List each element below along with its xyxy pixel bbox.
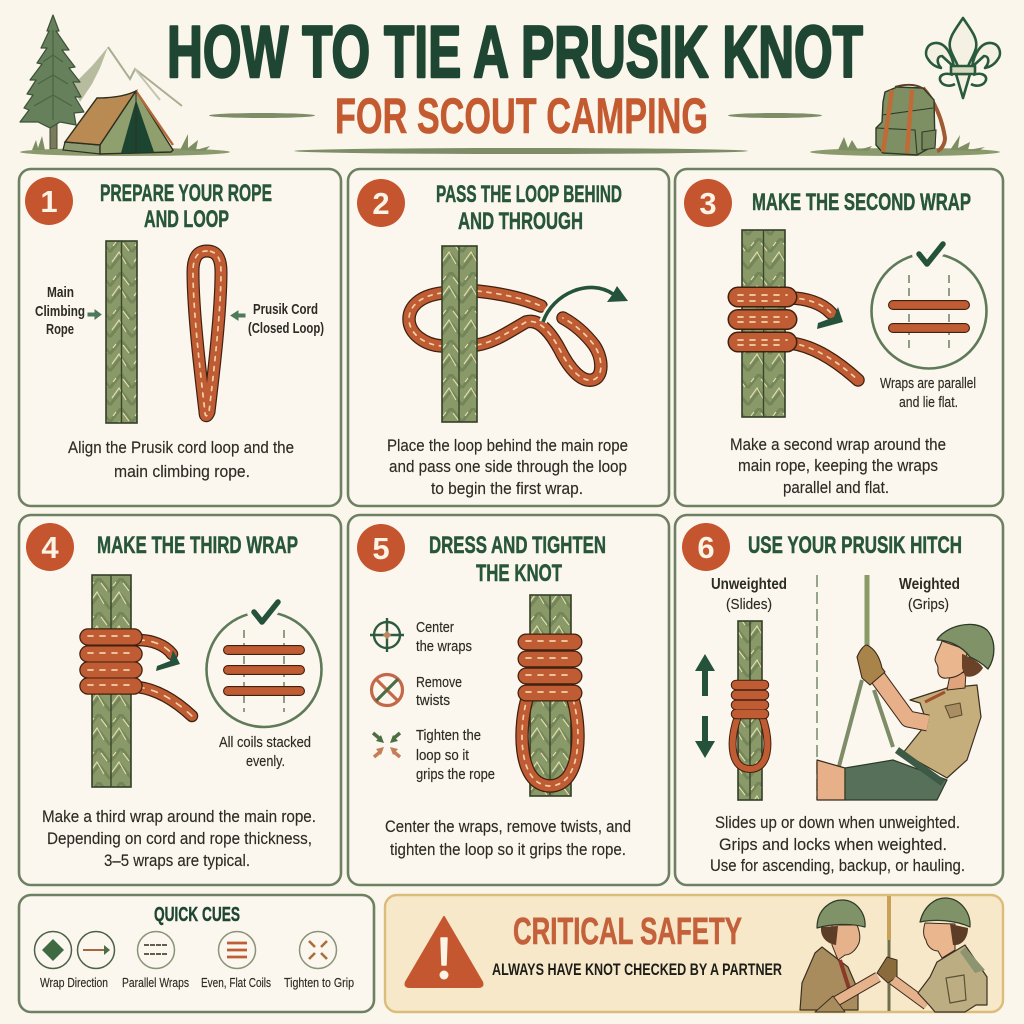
main rope — [738, 621, 762, 800]
step number 1: 1 — [40, 184, 58, 219]
step 4 text: Make a third wrap around the main rope. — [42, 807, 316, 826]
arrow: wrap direction — [817, 307, 843, 329]
icon: tighten arrows — [373, 733, 400, 757]
label: unweighted: Unweighted — [711, 576, 787, 593]
step 5 heading — [429, 532, 606, 587]
step number 4 — [26, 523, 74, 571]
cue icon: tighten — [300, 932, 336, 968]
step 6 text: Use for ascending, backup, or hauling. — [710, 856, 965, 875]
small prusik knot — [733, 685, 767, 769]
callout circle: stacked coils — [206, 612, 322, 727]
label: prusik cord: Prusik Cord — [253, 302, 318, 318]
step 2 heading: AND THROUGH — [458, 208, 583, 235]
illustration: two scouts checking knot — [800, 896, 987, 1012]
wraps — [738, 295, 787, 345]
step number 2 — [357, 179, 405, 227]
step number 3: 3 — [699, 186, 717, 221]
step 6 text: Grips and locks when weighted. — [719, 835, 947, 854]
step 5 heading: THE KNOT — [476, 560, 562, 587]
cue labels: Parallel Wraps — [122, 975, 189, 990]
tips text: the wraps — [416, 639, 472, 655]
icon: check mark — [254, 602, 278, 622]
step 1 text — [68, 438, 294, 481]
step number 2: 2 — [372, 186, 390, 221]
step 3 text: Make a second wrap around the — [730, 435, 946, 454]
cue icon: even coils — [218, 932, 256, 968]
cue labels — [40, 975, 354, 990]
step number 4: 4 — [41, 530, 59, 565]
prusik cord loop — [409, 291, 601, 380]
label: unweighted: (Slides) — [726, 597, 772, 613]
panel: step 1 — [19, 169, 341, 506]
safety heading: CRITICAL SAFETY — [513, 911, 742, 953]
callout caption: All coils stacked — [219, 735, 311, 751]
safety message: ALWAYS HAVE KNOT CHECKED BY A PARTNER — [492, 960, 782, 979]
left scout — [800, 947, 858, 1010]
step number 6 — [682, 523, 730, 571]
label: prusik cord: (Closed Loop) — [248, 321, 324, 337]
callout caption — [880, 376, 976, 411]
main rope — [92, 575, 131, 787]
label: main climbing rope: Rope — [46, 321, 74, 338]
arrow to main rope — [88, 310, 101, 319]
cue labels: Even, Flat Coils — [201, 975, 271, 990]
step number 5 — [357, 524, 405, 572]
header illustration: tent — [20, 91, 230, 156]
tips text: Tighten the — [416, 728, 481, 744]
arrow down — [695, 716, 715, 758]
panel: step 2 — [348, 169, 669, 506]
cue labels: Tighten to Grip — [284, 975, 354, 990]
header illustration: mountain — [72, 47, 182, 106]
main rope — [106, 241, 137, 423]
step 3 text — [730, 435, 946, 497]
subtitle: FOR SCOUT CAMPING — [335, 88, 708, 144]
step 1 heading: PREPARE YOUR ROPE — [100, 180, 272, 207]
quick cues heading: QUICK CUES — [154, 904, 240, 926]
step 2 text: Place the loop behind the main rope — [387, 436, 628, 455]
arrow to prusik cord — [231, 311, 245, 320]
tightened knot — [522, 641, 578, 786]
callout caption: Wraps are parallel — [880, 376, 976, 392]
step number 5: 5 — [372, 531, 390, 566]
tips text: Center — [416, 620, 454, 636]
step 2 heading — [436, 181, 622, 235]
icon: warning triangle — [406, 917, 482, 987]
step 3 text: parallel and flat. — [783, 478, 889, 497]
callout caption — [219, 735, 311, 770]
illustration: climbing scout — [817, 575, 994, 800]
icon: fleur-de-lis — [926, 18, 1000, 98]
cue icon: parallel wraps — [138, 932, 174, 968]
wraps — [88, 636, 134, 686]
prusik loop — [193, 251, 221, 416]
label: prusik cord — [248, 302, 324, 337]
step number 1 — [25, 177, 73, 225]
tips text: twists — [416, 693, 450, 709]
label: main climbing rope: Climbing — [35, 303, 85, 320]
panel: step 5 — [348, 515, 669, 885]
step 4 text: 3–5 wraps are typical. — [104, 851, 250, 870]
cue labels: Wrap Direction — [40, 975, 108, 990]
step 5 text: Center the wraps, remove twists, and — [385, 817, 631, 836]
step 5 text — [385, 817, 631, 859]
tips text — [416, 620, 495, 783]
tips text: Remove — [416, 675, 462, 691]
panel: step 6 — [675, 515, 1003, 885]
panel: step 4 — [19, 515, 341, 885]
panel: step 3 — [675, 169, 1003, 506]
step number 6: 6 — [697, 530, 715, 565]
callout caption: evenly. — [246, 754, 285, 770]
step 4 text: Depending on cord and rope thickness, — [47, 829, 312, 848]
arrow: wrap direction — [156, 650, 180, 671]
tails — [138, 640, 192, 716]
arrow up — [695, 654, 715, 696]
label: weighted — [899, 576, 960, 613]
step 1 text: Align the Prusik cord loop and the — [68, 438, 294, 457]
right scout — [893, 980, 927, 1005]
step 1 text: main climbing rope. — [114, 462, 250, 481]
dashed divider — [816, 575, 818, 800]
step number 3 — [684, 179, 732, 227]
icon: target — [370, 618, 404, 652]
label: main climbing rope — [35, 284, 85, 338]
main rope — [742, 230, 785, 417]
icon: remove twists — [372, 674, 402, 706]
step 2 text: and pass one side through the loop — [389, 457, 627, 476]
callout caption: and lie flat. — [899, 395, 958, 411]
step 6 text: Slides up or down when unweighted. — [715, 813, 960, 832]
arrow: pass through — [543, 286, 628, 322]
cue icon: wrap direction — [34, 932, 72, 968]
main rope — [442, 246, 477, 422]
step 1 heading — [100, 180, 272, 233]
step 3 text: main rope, keeping the wraps — [738, 456, 938, 475]
step 2 text: to begin the first wrap. — [431, 479, 583, 498]
header dividers — [209, 113, 822, 154]
step 4 heading: MAKE THE THIRD WRAP — [97, 532, 298, 559]
callout circle: parallel wraps — [872, 254, 986, 368]
header illustration: pine tree — [20, 15, 84, 149]
step 5 text: tighten the loop so it grips the rope. — [390, 840, 626, 859]
step 1 heading: AND LOOP — [144, 206, 229, 233]
icon: check mark — [919, 244, 943, 264]
step 5 heading: DRESS AND TIGHTEN — [429, 532, 606, 559]
panel: critical safety — [385, 895, 1003, 1012]
tails — [790, 298, 858, 380]
label: weighted: Weighted — [899, 576, 960, 593]
step 2 heading: PASS THE LOOP BEHIND — [436, 181, 622, 208]
main rope — [530, 595, 571, 796]
step 4 text — [42, 807, 316, 870]
label: weighted: (Grips) — [908, 597, 949, 613]
step 2 text — [387, 436, 628, 498]
tips text: loop so it — [416, 748, 469, 764]
header illustration: backpack — [810, 85, 1000, 156]
label: unweighted — [711, 576, 787, 613]
panel: quick cues — [19, 895, 374, 1012]
cue icon: wrap arrow — [78, 932, 114, 968]
step 6 text — [710, 813, 965, 875]
label: main climbing rope: Main — [47, 284, 74, 301]
tips text: grips the rope — [416, 767, 495, 783]
